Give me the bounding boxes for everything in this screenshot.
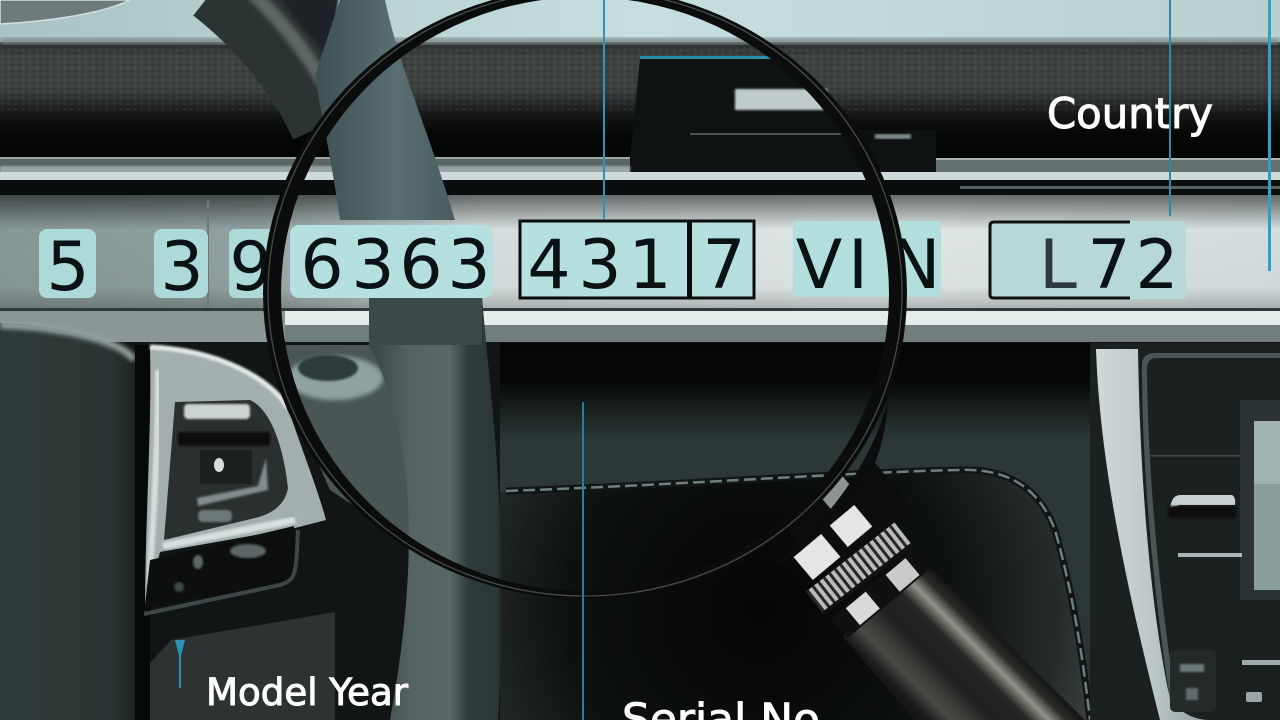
boxed tiles: L72: L <box>1039 226 1077 305</box>
console silver trim <box>1096 349 1210 720</box>
tile: 9: 9 <box>229 228 273 307</box>
handle barrel <box>843 560 1085 720</box>
boxed tiles: 4317: 1 <box>628 226 672 305</box>
serial number line <box>582 402 584 720</box>
steering wheel rim inside lens, lower <box>369 296 502 720</box>
tiles: 6363: 6 <box>300 226 344 305</box>
tiles: 6363 <box>290 225 493 305</box>
boxed tiles: 4317 <box>520 221 754 305</box>
console switch <box>1170 495 1235 508</box>
line at right edge <box>1268 0 1271 271</box>
label: Country: Country <box>1047 89 1213 138</box>
label: Model Year: Model Year <box>206 671 409 714</box>
tile: 3: 3 <box>160 228 204 307</box>
lower collar <box>831 546 933 638</box>
lens backdrop beside wheel <box>285 345 460 575</box>
upper trim strip <box>0 157 1280 196</box>
model year marker <box>175 640 185 688</box>
lower left dark base <box>0 342 500 720</box>
lower trim strip <box>0 308 1280 361</box>
upper dashboard <box>0 38 1280 160</box>
collar <box>789 460 916 582</box>
lower left panel <box>98 612 335 720</box>
VIN tile: I <box>848 226 868 305</box>
boxed tiles: L72: 7 <box>1087 226 1131 305</box>
top-left corner of dash <box>0 0 130 24</box>
knurled ring <box>806 522 913 615</box>
VIN digit tiles <box>39 221 1186 307</box>
silver VIN band <box>0 195 1280 350</box>
VIN tile: N <box>890 226 940 305</box>
line to 4317 tile <box>603 0 605 219</box>
windshield band <box>0 0 1280 58</box>
tiles: 6363: 3 <box>447 226 491 305</box>
dashboard vent <box>628 56 936 172</box>
steering wheel rim outside lens <box>215 0 340 125</box>
VIN tile: V <box>796 226 842 305</box>
tiles: 6363: 6 <box>399 226 443 305</box>
center console <box>1090 343 1280 720</box>
VIN tile <box>793 221 941 305</box>
bright blocks <box>794 474 872 580</box>
tiles: 6363: 3 <box>351 226 395 305</box>
steering wheel button cluster <box>144 347 326 614</box>
boxed tiles: L72: 2 <box>1135 226 1179 305</box>
magnifying glass handle <box>789 460 1085 720</box>
leather stitching <box>506 470 1090 720</box>
light oval behind lens <box>287 355 383 400</box>
boxed tiles: 4317: 4 <box>527 226 571 305</box>
steering wheel rim inside lens, upper <box>315 0 455 220</box>
boxed tiles: 4317: 7 <box>702 226 746 305</box>
magnifying glass ring <box>263 0 907 599</box>
glovebox leather panel <box>500 343 1100 720</box>
line to L72 tile <box>1169 0 1171 216</box>
boxed tiles: L72 <box>990 221 1186 305</box>
steering wheel hub <box>0 323 150 720</box>
console buttons <box>1170 650 1280 712</box>
tile: 5: 5 <box>46 228 90 307</box>
boxed tiles: 4317: 3 <box>578 226 622 305</box>
console screen <box>1240 400 1280 600</box>
